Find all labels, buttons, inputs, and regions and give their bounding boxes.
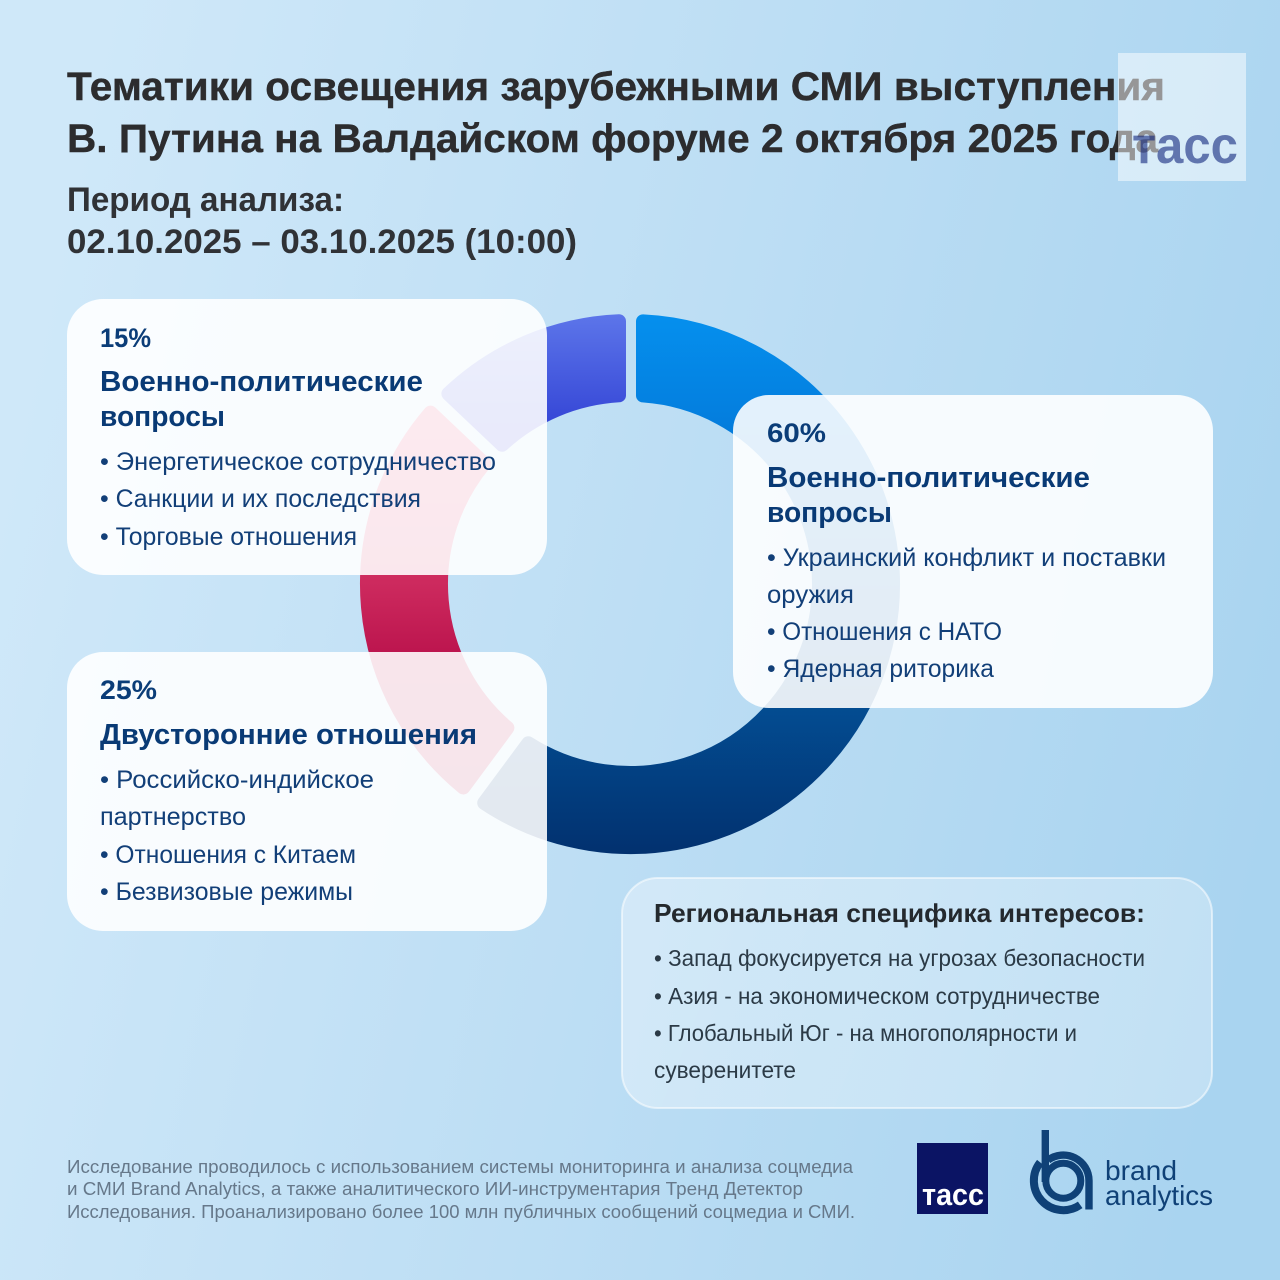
panel: 15% topics: [67, 299, 547, 575]
regional list: суверенитете: [654, 1057, 796, 1083]
topic list: • Ядерная риторика: [767, 655, 994, 683]
topic list: [100, 448, 496, 551]
analysis period subtitle: [67, 181, 577, 261]
topic list: [767, 544, 1166, 683]
topic list: • Украинский конфликт и поставки: [767, 544, 1166, 572]
analysis period subtitle: 02.10.2025 – 03.10.2025 (10:00): [67, 223, 577, 261]
donut chart: [367, 321, 893, 847]
watermark: TASS: [1118, 53, 1246, 181]
panel heading: Региональная специфика интересов:: [654, 898, 1145, 928]
wordmark: brand: [1105, 1155, 1177, 1186]
panel heading: Военно-политические: [767, 462, 1090, 494]
panel heading: вопросы: [767, 497, 892, 529]
panel: 25% topics: [67, 652, 547, 931]
percentage 15%: 15%: [100, 323, 151, 353]
topic list: • Санкции и их последствия: [100, 485, 421, 513]
topic list: • Безвизовые режимы: [100, 878, 353, 906]
topic list: • Отношения с Китаем: [100, 841, 356, 869]
panel heading: Двусторонние отношения: [100, 719, 477, 751]
footer note: Исследования. Проанализировано более 100 млн публичных сообщений соцмедиа и СМИ.: [67, 1202, 855, 1222]
logo: TASS: тасс: [922, 1177, 984, 1212]
title: В. Путина на Валдайском форуме 2 октября 2025 года: [67, 117, 1159, 161]
topic list: • Энергетическое сотрудничество: [100, 448, 496, 476]
topic list: • Торговые отношения: [100, 523, 357, 551]
logo: Brand Analytics: [1034, 1130, 1213, 1211]
donut segment: 15%: [448, 321, 619, 445]
logo: TASS: [917, 1143, 988, 1214]
footer note: [67, 1157, 855, 1222]
regional list: • Запад фокусируется на угрозах безопасности: [654, 945, 1145, 971]
donut segment: 25%: [367, 413, 507, 787]
panel: 60% topics: [733, 395, 1213, 708]
topic list: оружия: [767, 581, 854, 609]
icon: brand analytics mark: [1034, 1130, 1089, 1210]
wordmark: [1105, 1155, 1213, 1211]
footer note: Исследование проводилось с использованием системы мониторинга и анализа соцмедиа: [67, 1157, 854, 1177]
panel heading: Военно-политические: [100, 366, 423, 398]
watermark: TASS: тасс: [1132, 117, 1238, 175]
topic list: [100, 766, 374, 906]
analysis period subtitle: Период анализа:: [67, 181, 344, 219]
panel heading: [767, 462, 1090, 529]
topic list: • Отношения с НАТО: [767, 618, 1002, 646]
topic list: партнерство: [100, 803, 246, 831]
topic list: • Российско-индийское: [100, 766, 374, 794]
panel heading: вопросы: [100, 401, 225, 433]
percentage 60%: 60%: [767, 418, 826, 448]
regional list: • Азия - на экономическом сотрудничестве: [654, 983, 1100, 1009]
panel: regional specifics: [622, 878, 1212, 1108]
panel heading: [100, 366, 423, 433]
regional list: [654, 945, 1145, 1083]
wordmark: analytics: [1105, 1180, 1213, 1211]
title: [67, 65, 1165, 161]
percentage 25%: 25%: [100, 675, 157, 705]
regional list: • Глобальный Юг - на многополярности и: [654, 1020, 1077, 1046]
footer note: и СМИ Brand Analytics, а также аналитического ИИ-инструментария Тренд Детектор: [67, 1179, 803, 1199]
title: Тематики освещения зарубежными СМИ выступления: [67, 65, 1165, 109]
donut segment: 60%: [484, 321, 893, 847]
